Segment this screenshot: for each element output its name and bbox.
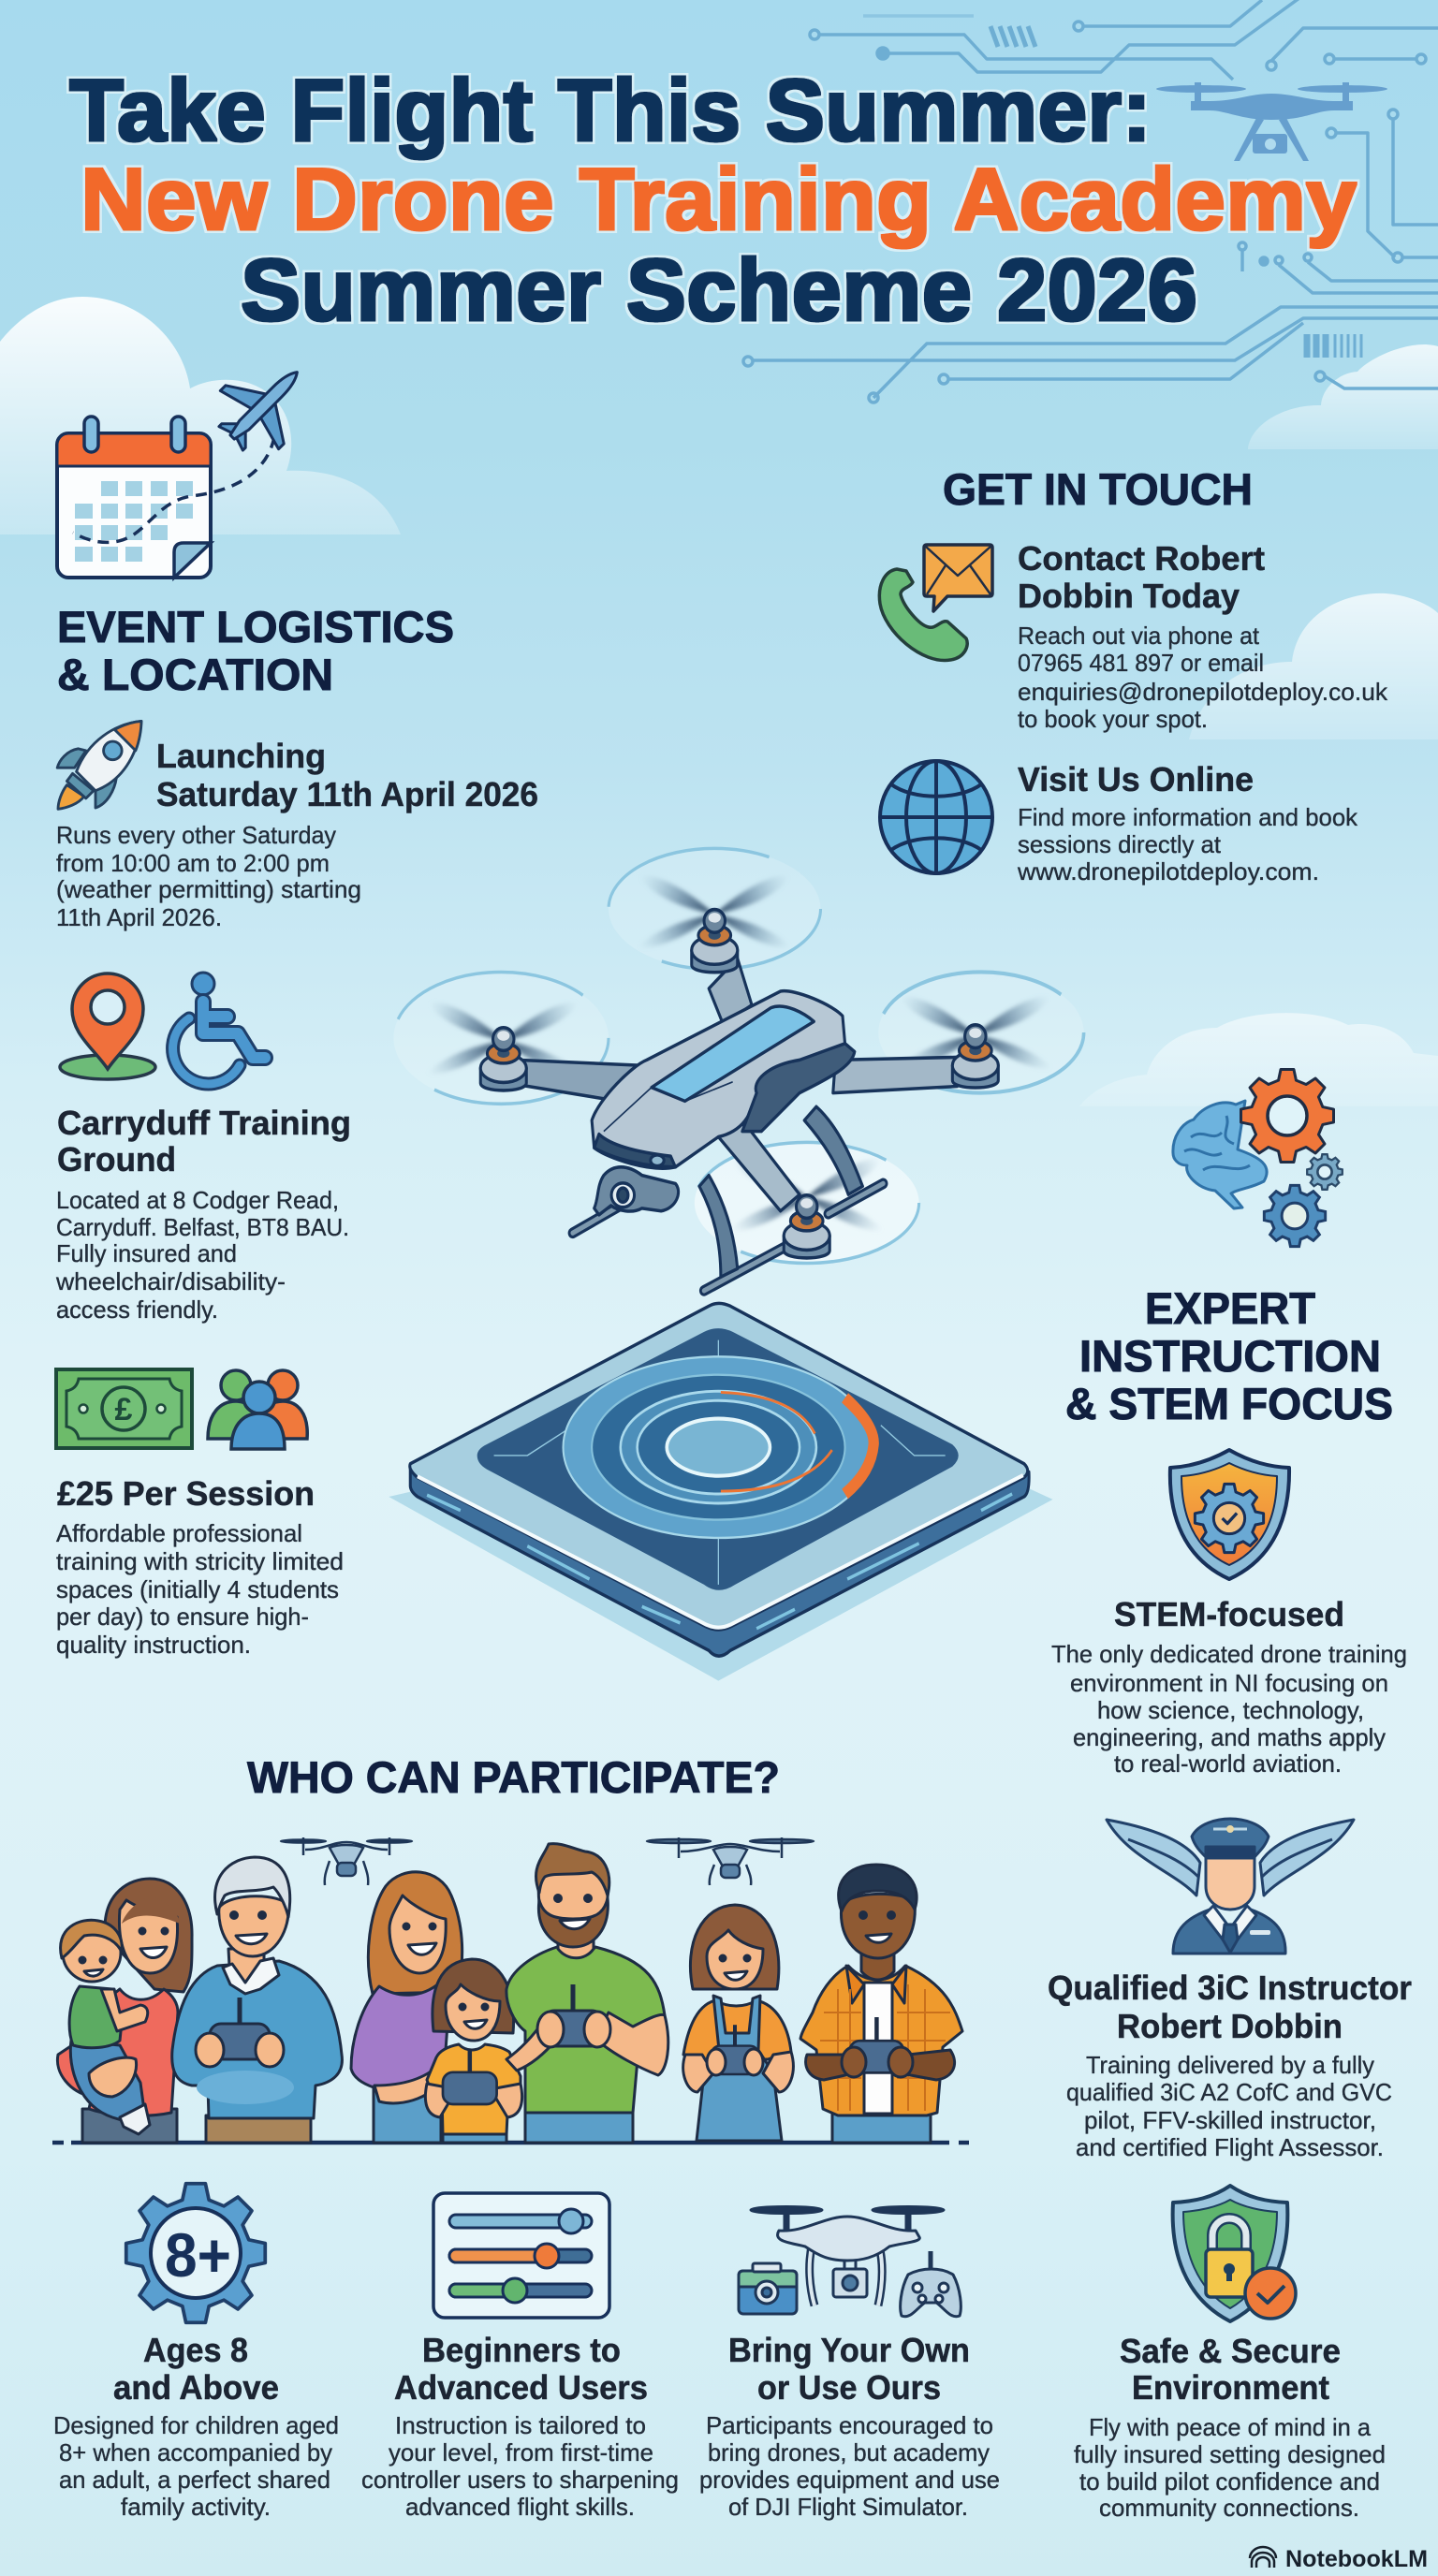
icon: wheelchair [173, 973, 265, 1084]
title: Summer Scheme 2026 [241, 241, 1197, 339]
rotor: top [609, 848, 821, 970]
text: schedule: Runs every other Saturday [56, 821, 336, 849]
text: price details: quality instruction. [56, 1631, 251, 1659]
text: contact details: to book your spot. [1018, 705, 1208, 733]
text: beginners details: controller users to sharpening [361, 2466, 679, 2494]
text: equipment details: Participants encouraged to [706, 2411, 993, 2439]
heading: ages: Ages 8 [143, 2331, 248, 2369]
heading: carryduff: Carryduff Training [57, 1104, 351, 1142]
icon: group of people [208, 1370, 307, 1449]
text: contact details: Reach out via phone at [1018, 622, 1260, 650]
ground line [52, 2141, 969, 2144]
title [69, 61, 1357, 339]
illustration: central drone [393, 848, 1084, 1291]
text: STEM details: to real-world aviation. [1114, 1749, 1342, 1778]
heading: STEM-focused: STEM-focused [1114, 1595, 1344, 1633]
arrow: dashed flight path [73, 437, 274, 542]
text: instructor details: qualified 3iC A2 CofC and GVC [1066, 2078, 1392, 2106]
text: contact details [1018, 622, 1388, 733]
text: safety details [1074, 2413, 1386, 2522]
heading: event logistics: & LOCATION [57, 650, 333, 699]
person: child in yellow [425, 1959, 522, 2143]
person: man in green [506, 1844, 668, 2143]
text: location details: Carryduff. Belfast, BT8 BAU. [56, 1213, 349, 1241]
heading: expert instruction: INSTRUCTION [1079, 1331, 1381, 1381]
heading: qualified instructor [1048, 1969, 1412, 2045]
heading: ages [113, 2331, 279, 2407]
icon: drone with camera and controller [739, 2207, 961, 2317]
icon: pilot with wings [1107, 1819, 1354, 1954]
heading: launching: Launching [156, 737, 326, 775]
person: man in orange shirt [800, 1865, 962, 2143]
panel: who can participate [52, 1752, 969, 2143]
text: STEM details [1051, 1640, 1407, 1778]
heading: carryduff [57, 1104, 351, 1178]
person: grandfather [172, 1857, 342, 2143]
heading: qualified instructor: Qualified 3iC Instructor [1048, 1969, 1412, 2007]
panel: expert instruction [1048, 1069, 1412, 2161]
person: woman in purple [351, 1872, 462, 2143]
text: safety details: community connections. [1099, 2494, 1359, 2522]
person: girl in overalls [683, 1905, 793, 2141]
text: location details: Located at 8 Codger Read, [56, 1186, 339, 1214]
text: beginners details: Instruction is tailored to [395, 2411, 646, 2439]
text: schedule: 11th April 2026. [56, 903, 222, 931]
heading: visit online: Visit Us Online [1018, 760, 1254, 798]
text: STEM details: The only dedicated drone training [1051, 1640, 1407, 1668]
text: schedule [56, 821, 361, 931]
text: website details: Find more information and book [1018, 803, 1358, 831]
text: ages details [53, 2411, 339, 2521]
icon: location pin [60, 973, 155, 1079]
card: safe and secure [1074, 2186, 1386, 2522]
heading: contact: Contact Robert [1018, 539, 1265, 578]
heading: beginners: Beginners to [422, 2331, 621, 2369]
cloud: middle right [1079, 1013, 1438, 1106]
icon: calendar [57, 417, 211, 578]
motors [480, 910, 998, 1258]
card: ages 8 and above [53, 2184, 339, 2521]
text: website details: www.dronepilotdeploy.com. [1017, 857, 1319, 886]
icon: gear with 8+: 8+ [165, 2220, 231, 2290]
text: price details [56, 1519, 344, 1659]
text: price details: Affordable professional [56, 1519, 302, 1547]
card: beginners to advanced [361, 2193, 679, 2521]
icon: envelope [924, 545, 992, 611]
text: safety details: fully insured setting designed [1074, 2440, 1386, 2468]
text: schedule: from 10:00 am to 2:00 pm [56, 849, 330, 877]
person: mother holding child [57, 1879, 192, 2143]
rotor: bottom [695, 1142, 919, 1264]
heading: safe and secure: Environment [1132, 2368, 1329, 2407]
heading: bring your own [728, 2331, 970, 2407]
text: contact details: enquiries@dronepilotdeploy.co.uk [1018, 678, 1388, 706]
text: beginners details: advanced flight skills. [405, 2493, 635, 2521]
heading: carryduff: Ground [57, 1140, 176, 1178]
heading: bring your own: or Use Ours [757, 2368, 941, 2407]
text: ages details: family activity. [121, 2493, 271, 2521]
icon: drone silhouette [1156, 82, 1387, 161]
text: price details: spaces (initially 4 students [56, 1575, 339, 1603]
heading: expert instruction: & STEM FOCUS [1065, 1379, 1393, 1428]
text: equipment details [699, 2411, 1000, 2521]
panel: event logistics [55, 344, 538, 1659]
icon: plane [202, 344, 326, 467]
title: New Drone Training Academy [81, 150, 1357, 248]
icon: green shield with padlock [1173, 2186, 1296, 2321]
icon: phone [879, 569, 967, 660]
heading: expert instruction [1065, 1283, 1393, 1428]
circuit board pattern [743, 0, 1438, 402]
text: location details: Fully insured and [56, 1239, 237, 1267]
icon: rocket [57, 721, 141, 809]
heading: event logistics [57, 602, 454, 699]
heading: event logistics: EVENT LOGISTICS [57, 602, 454, 651]
illustration: landing pad [389, 1303, 1052, 1681]
title: Take Flight This Summer: [69, 61, 1152, 159]
text: instructor details: and certified Flight Assessor. [1076, 2133, 1384, 2161]
text: STEM details: how science, technology, [1097, 1696, 1364, 1724]
heading: get in touch: GET IN TOUCH [943, 464, 1253, 514]
heading: contact [1018, 539, 1265, 615]
heading: beginners: Advanced Users [394, 2368, 648, 2407]
cloud: top right [1248, 344, 1438, 449]
text: equipment details: bring drones, but academy [708, 2438, 990, 2466]
logo: NotebookLM: NotebookLM [1285, 2546, 1428, 2572]
text: schedule: (weather permitting) starting [56, 875, 361, 903]
text: price details: per day) to ensure high- [56, 1603, 309, 1631]
heading: contact: Dobbin Today [1018, 577, 1240, 615]
icon: banknote: £ [115, 1392, 133, 1427]
icon: gear with 8+ [126, 2184, 265, 2322]
text: ages details: 8+ when accompanied by [59, 2438, 332, 2466]
text: website details [1017, 803, 1358, 886]
text: ages details: an adult, a perfect shared [59, 2466, 330, 2494]
card: bring your own [699, 2207, 1000, 2521]
text: website details: sessions directly at [1018, 830, 1222, 858]
text: equipment details: of DJI Flight Simulator. [728, 2493, 968, 2521]
rotor: right [878, 972, 1084, 1093]
text: price details: training with stricity limited [56, 1547, 344, 1575]
heading: expert instruction: EXPERT [1145, 1283, 1315, 1333]
text: ages details: Designed for children aged [53, 2411, 339, 2439]
heading: ages: and Above [113, 2368, 279, 2407]
text: instructor details: pilot, FFV-skilled instructor, [1084, 2106, 1376, 2134]
icon: sliders [433, 2193, 609, 2318]
heading: safe and secure: Safe & Secure [1120, 2332, 1341, 2370]
cloud: beside contact [1189, 593, 1438, 739]
text: safety details: Fly with peace of mind in a [1089, 2413, 1372, 2441]
heading: launching: Saturday 11th April 2026 [156, 775, 538, 813]
rotor: left [393, 972, 609, 1104]
heading: qualified instructor: Robert Dobbin [1117, 2007, 1343, 2045]
heading: beginners [394, 2331, 648, 2407]
heading: who can participate: WHO CAN PARTICIPATE? [247, 1752, 780, 1802]
text: STEM details: engineering, and maths apply [1073, 1723, 1386, 1751]
text: instructor details: Training delivered by a fully [1086, 2051, 1374, 2079]
text: equipment details: provides equipment and use [699, 2466, 1000, 2494]
heading: safe and secure [1120, 2332, 1341, 2407]
text: location details [55, 1186, 349, 1324]
cloud: top left [0, 297, 401, 534]
text: contact details: 07965 481 897 or email [1018, 649, 1264, 677]
heading: launching [156, 737, 538, 813]
text: beginners details [361, 2411, 679, 2521]
text: STEM details: environment in NI focusing on [1070, 1669, 1388, 1697]
icon: orange gear [1241, 1069, 1333, 1163]
icon: small drone left [281, 1837, 412, 1885]
heading: bring your own: Bring Your Own [728, 2331, 970, 2369]
panel: get in touch [879, 464, 1388, 886]
icon: small drone right [647, 1837, 814, 1885]
text: beginners details: your level, from first-time [389, 2438, 653, 2466]
text: safety details: to build pilot confidence and [1079, 2467, 1380, 2496]
text: location details: access friendly. [56, 1295, 218, 1324]
heading: price: £25 Per Session [57, 1474, 315, 1513]
icon: blue gear [1264, 1185, 1326, 1247]
icon: brain [1173, 1101, 1267, 1208]
icon: globe [880, 761, 992, 873]
text: instructor details [1066, 2051, 1392, 2161]
text: location details: wheelchair/disability- [55, 1267, 286, 1295]
icon: STEM shield [1170, 1450, 1289, 1579]
icon: banknote [56, 1369, 192, 1448]
icon: small gear [1307, 1154, 1343, 1190]
